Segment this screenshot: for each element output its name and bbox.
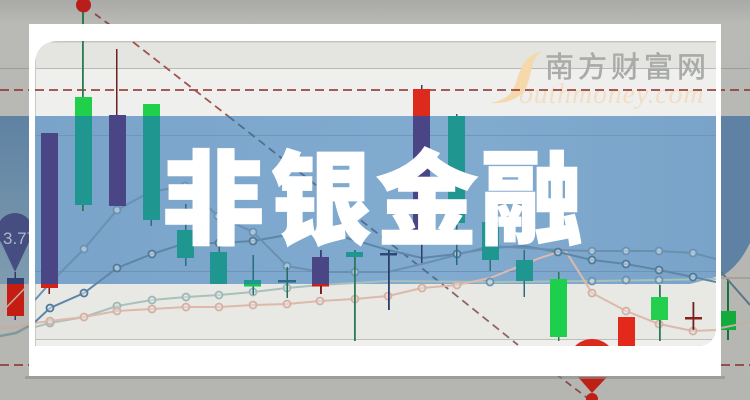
average markers [46,182,696,334]
pink average [35,250,716,331]
candle 10 [346,250,363,341]
candle 16 [550,272,567,341]
window blue band [35,116,716,284]
outer right candle [721,280,736,340]
candle 9 [312,250,329,294]
candle 2 [75,41,92,211]
candle 17 [618,317,635,347]
outer lines left [0,284,29,336]
outer blue band left [0,116,30,284]
title [162,144,583,258]
moving average lines [35,186,716,331]
title: 银 [270,144,372,258]
candlesticks [41,41,702,346]
window background [35,41,716,346]
outer dashed level lines [0,90,750,365]
chart window [35,41,716,346]
left price pin: 3.77 [3,229,36,248]
candle 13 [448,114,465,265]
candle 12 [413,85,430,263]
candle 11 [380,250,397,310]
candle 3 [109,49,126,206]
title: 非 [162,144,264,258]
top red pin [76,0,91,25]
bottom red pin [578,377,607,400]
window red pin [575,339,609,346]
pale green average [35,279,716,327]
title: 融 [481,144,583,258]
outer left candle [7,272,24,320]
upper blue average [35,186,716,300]
candle 7 [244,255,261,295]
candle 4 [143,104,160,226]
candle 19 [685,302,702,330]
candle 15 [516,250,533,297]
watermark: 南方财富网 [545,51,710,84]
candle 18 [651,285,668,341]
outer blue band right [720,116,750,277]
outer lines right [721,272,750,328]
title: 金 [376,144,478,258]
candle 8 [278,267,296,298]
watermark: outhmoney.com [519,79,704,110]
dashed level line [35,89,716,91]
left price pin [0,213,36,272]
candle 14 [482,220,499,271]
outer diagonal dashes [95,14,590,400]
diagonal dashed line [133,42,518,345]
watermark [490,51,710,110]
candle 6 [210,245,227,284]
dark blue average [35,231,716,322]
candle 5 [177,204,194,266]
candle 1 [41,133,58,294]
